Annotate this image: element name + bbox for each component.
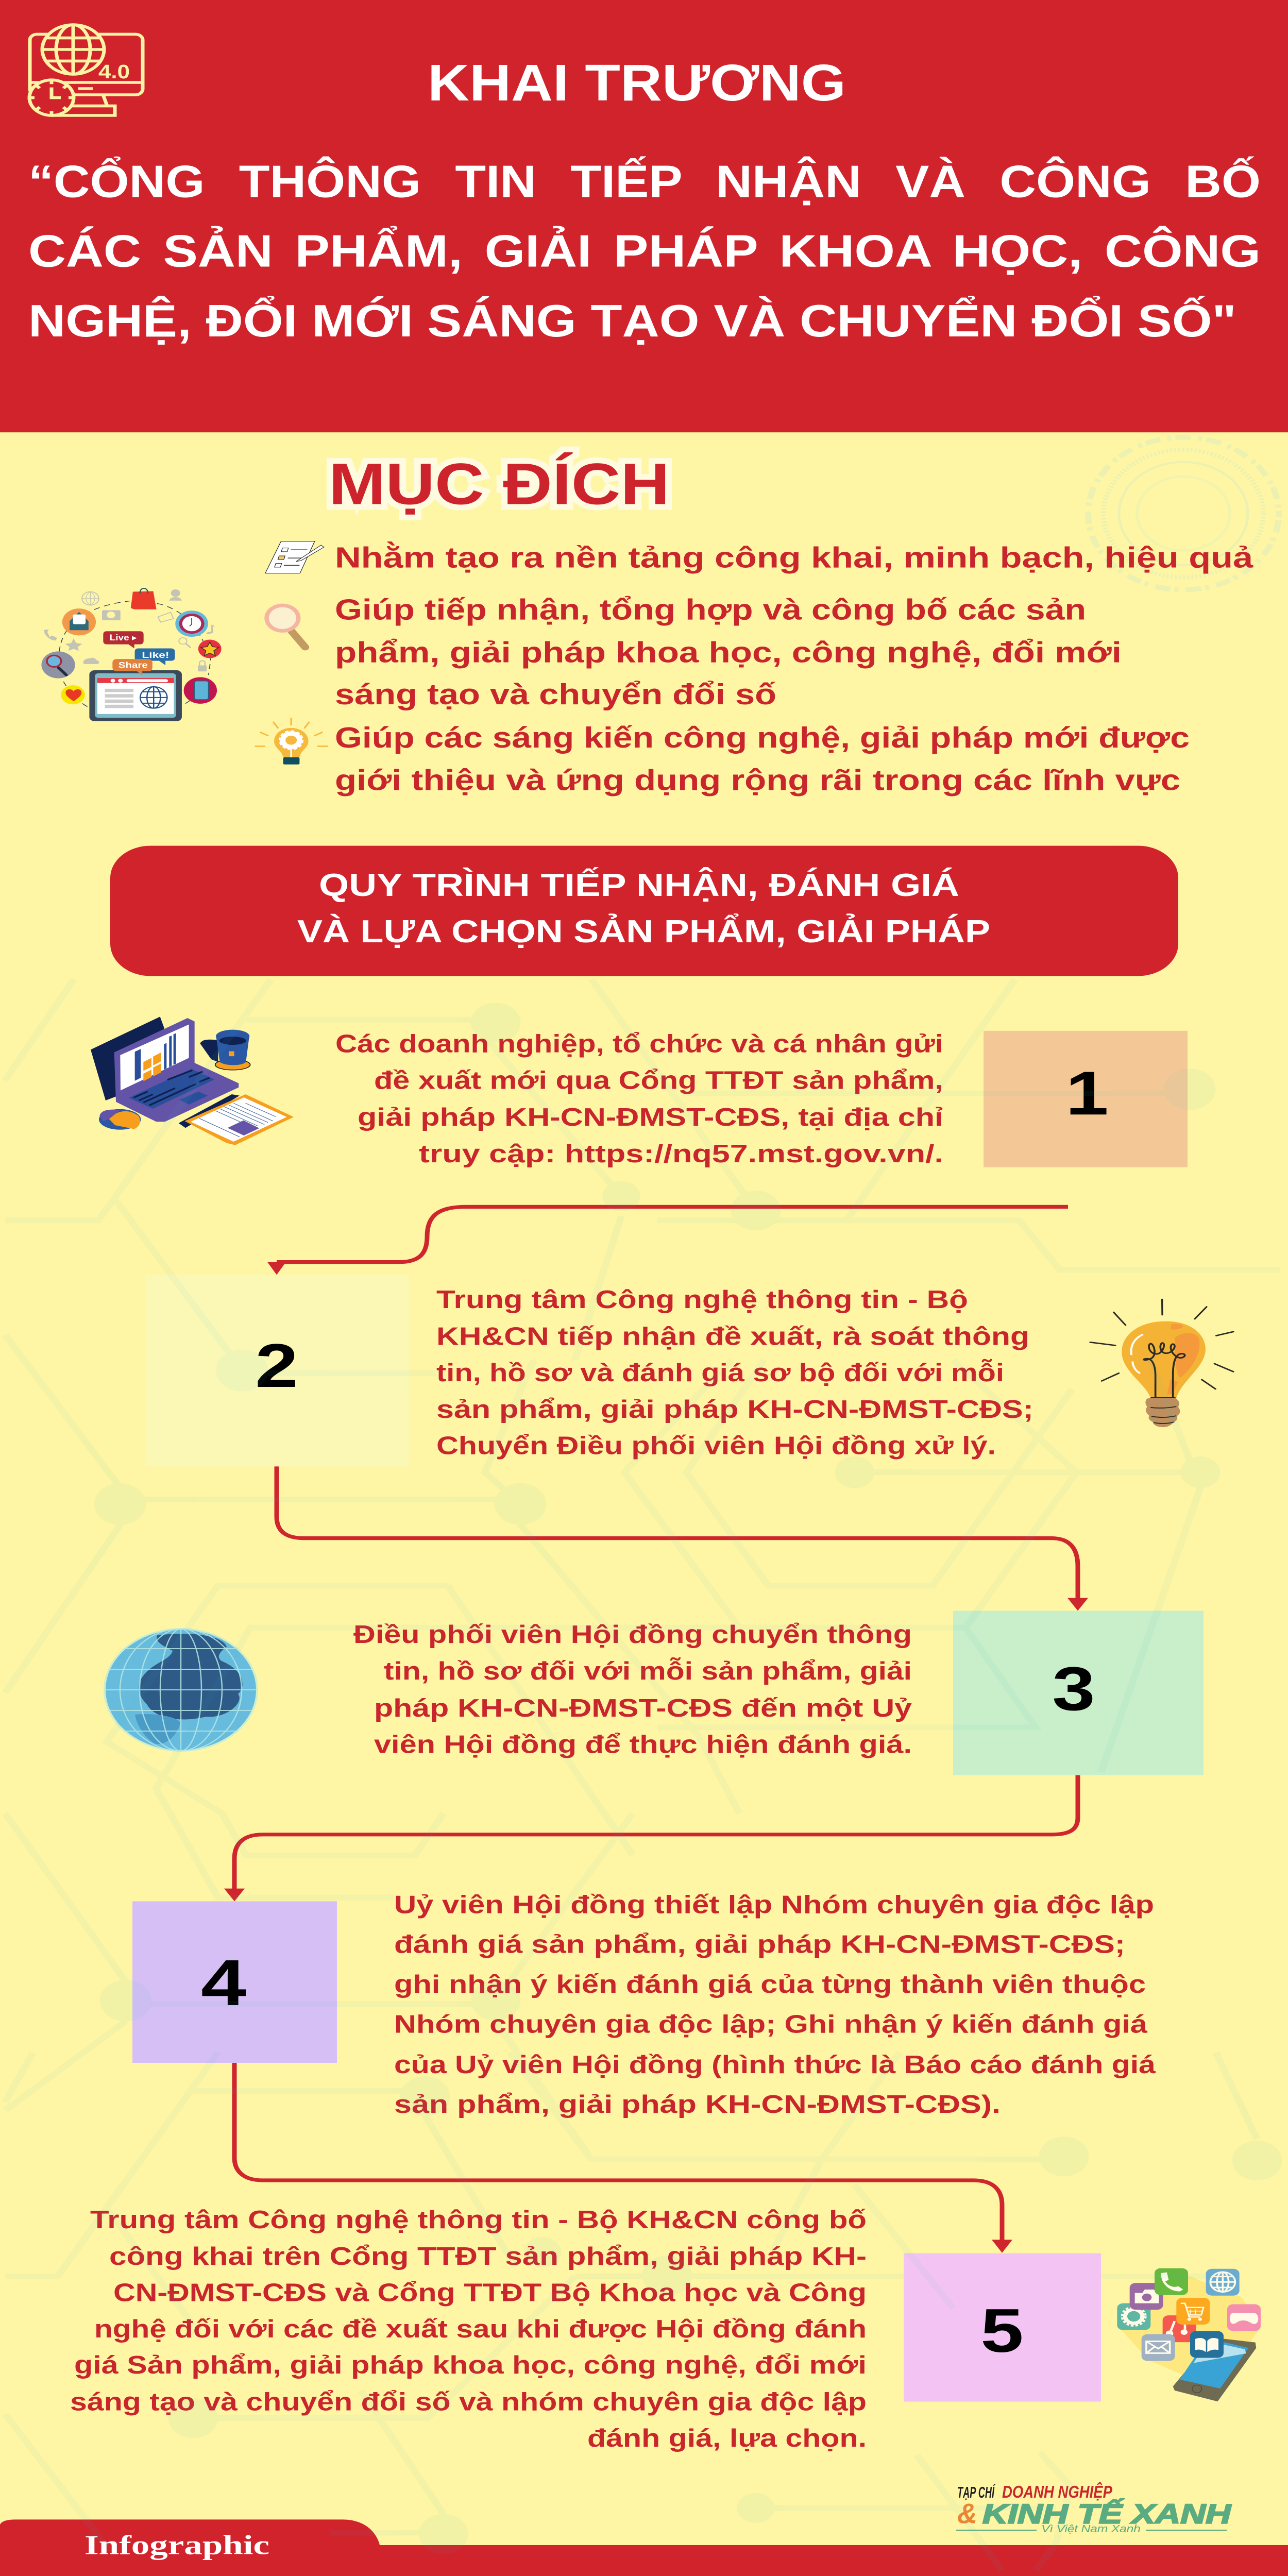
step 2 text: KH&CN tiếp nhận đề xuất, rà soát thông: [436, 1322, 1029, 1350]
step 1 text: Các doanh nghiệp, tổ chức và cá nhân gửi: [335, 1029, 943, 1058]
step 1 text: truy cập: https://nq57.mst.gov.vn/.: [419, 1140, 943, 1168]
step 1 text: giải pháp KH-CN-ĐMST-CĐS, tại địa chỉ: [358, 1103, 943, 1131]
background circuit pattern overlay: [5, 979, 1282, 2570]
icon: globe: [105, 1629, 257, 1751]
step 2 text: sản phẩm, giải pháp KH-CN-ĐMST-CĐS;: [436, 1395, 1033, 1423]
icon: monitor with globe and clock: 4.0: [98, 61, 130, 83]
step 5 text: sáng tạo và chuyển đổi số và nhóm chuyên gia độc lập: [70, 2387, 867, 2416]
illustration: social media cluster: [41, 588, 222, 721]
step 5 text: đánh giá, lựa chọn.: [587, 2424, 867, 2452]
purpose list: [255, 541, 1253, 796]
icon: magnifier: [264, 604, 305, 647]
step 1 number box: 1: [1065, 1059, 1109, 1128]
text: third purpose: Giúp các sáng kiến công nghệ, giải pháp mới được: [335, 721, 1190, 754]
step 3 text: Điều phối viên Hội đồng chuyển thông: [353, 1620, 912, 1648]
step 5 number box: 5: [980, 2296, 1024, 2365]
illustration: social media cluster: Share: [118, 660, 148, 670]
step 4: [132, 1890, 1156, 2118]
step 5 number box: [904, 2253, 1101, 2402]
step 4 text: Nhóm chuyên gia độc lập; Ghi nhận ý kiến đánh giá: [394, 2010, 1147, 2038]
step 4 text: đánh giá sản phẩm, giải pháp KH-CN-ĐMST-CĐS;: [394, 1930, 1125, 1958]
step 5 text: [70, 2206, 867, 2452]
step 3 text: pháp KH-CN-ĐMST-CĐS đến một Uỷ: [374, 1694, 912, 1722]
illustration: social media cluster: Like!: [142, 651, 169, 660]
icon: monitor with globe and clock: [29, 25, 143, 115]
step 2 number box: 2: [255, 1331, 298, 1400]
step 5 text: giá Sản phẩm, giải pháp khoa học, công nghệ, đổi mới: [74, 2351, 867, 2379]
step 4 number box: [132, 1901, 337, 2063]
heading: mục đích: MỤC ĐÍCH: [329, 452, 670, 517]
footer bar: Infographic: [84, 2530, 269, 2560]
process banner: QUY TRÌNH TIẾP NHẬN, ĐÁNH GIÁ: [319, 867, 959, 903]
icon: gear bulb: [255, 718, 328, 765]
step 5 text: công khai trên Cổng TTĐT sản phẩm, giải pháp KH-: [109, 2242, 867, 2270]
step 3 text: [353, 1620, 912, 1758]
step 5 text: Trung tâm Công nghệ thông tin - Bộ KH&CN công bố: [90, 2206, 867, 2233]
step 4 text: sản phẩm, giải pháp KH-CN-ĐMST-CĐS).: [394, 2090, 1001, 2118]
text: second purpose: Giúp tiếp nhận, tổng hợp và công bố các sản: [335, 593, 1086, 626]
step 2 text: tin, hồ sơ và đánh giá sơ bộ đối với mỗi: [436, 1359, 1004, 1386]
title text: [28, 156, 1261, 346]
step 2 number box: [145, 1275, 409, 1466]
logo: kinh tế xanh: DOANH NGHIỆP: [1002, 2482, 1112, 2502]
step 4 text: của Uỷ viên Hội đồng (hình thức là Báo cáo đánh giá: [394, 2050, 1156, 2079]
arrow: step 3 to 4: [224, 1775, 1078, 1901]
text: second purpose: phẩm, giải pháp khoa học, công nghệ, đổi mới: [335, 636, 1122, 669]
step 5 text: CN-ĐMST-CĐS và Cổng TTĐT Bộ Khoa học và Công: [113, 2278, 867, 2307]
icon: laptop: [91, 1016, 294, 1145]
step 4 number box: 4: [201, 1946, 246, 2019]
header panel: [0, 0, 1288, 432]
arrow: step 2 to 3: [277, 1466, 1088, 1611]
step 1 text: [335, 1029, 943, 1168]
step 3: [105, 1611, 1204, 1775]
text: third purpose: [335, 721, 1190, 796]
logo: kinh tế xanh: [956, 2482, 1232, 2535]
step 2: [145, 1275, 1233, 1466]
text: second purpose: sáng tạo và chuyển đổi số: [335, 678, 776, 711]
process banner: [110, 846, 1178, 976]
step 1 text: đề xuất mới qua Cổng TTĐT sản phẩm,: [374, 1066, 943, 1094]
step 3 text: tin, hồ sơ đối với mỗi sản phẩm, giải: [384, 1657, 912, 1685]
step 3 text: viên Hội đồng để thực hiện đánh giá.: [374, 1730, 912, 1758]
heading: khai trương: KHAI TRƯƠNG: [428, 54, 846, 111]
step 4 text: [394, 1890, 1156, 2118]
step 4 text: Uỷ viên Hội đồng thiết lập Nhóm chuyên gia độc lập: [394, 1890, 1154, 1919]
text: second purpose: [335, 593, 1122, 711]
logo: kinh tế xanh: &: [957, 2498, 977, 2530]
step 3 number box: 3: [1052, 1654, 1095, 1723]
step 5: [70, 2206, 1261, 2452]
illustration: social media cluster: Live ▸: [110, 633, 137, 643]
logo: kinh tế xanh: KINH TẾ XANH: [982, 2499, 1232, 2529]
icon: checklist: [265, 541, 324, 573]
step 3 number box: [953, 1611, 1204, 1775]
footer bar: [0, 2519, 1288, 2576]
step 1: [91, 1016, 1188, 1168]
text: first purpose: Nhằm tạo ra nền tảng công khai, minh bạch, hiệu quả: [335, 541, 1253, 574]
arrow: step 1 to 2: [267, 1207, 1068, 1275]
logo: kinh tế xanh: Vì Việt Nam Xanh: [1041, 2523, 1141, 2535]
icon: light bulb: [1090, 1299, 1233, 1427]
decorative circuit ring: [1088, 437, 1279, 590]
text: third purpose: giới thiệu và ứng dụng rộng rãi trong các lĩnh vực: [335, 764, 1180, 796]
icon: phone with apps: [1117, 2268, 1261, 2401]
step 2 text: Trung tâm Công nghệ thông tin - Bộ: [436, 1285, 968, 1314]
step 4 text: ghi nhận ý kiến đánh giá của từng thành viên thuộc: [394, 1970, 1146, 1998]
step 2 text: Chuyển Điều phối viên Hội đồng xử lý.: [436, 1431, 996, 1460]
step 2 text: [436, 1285, 1033, 1460]
step 5 text: nghệ đối với các đề xuất sau khi được Hội đồng đánh: [94, 2315, 867, 2343]
process banner: VÀ LỰA CHỌN SẢN PHẨM, GIẢI PHÁP: [297, 913, 990, 949]
step 1 number box: [984, 1031, 1188, 1167]
logo: kinh tế xanh: TẠP CHÍ: [957, 2484, 996, 2501]
arrow: step 4 to 5: [234, 2063, 1012, 2253]
